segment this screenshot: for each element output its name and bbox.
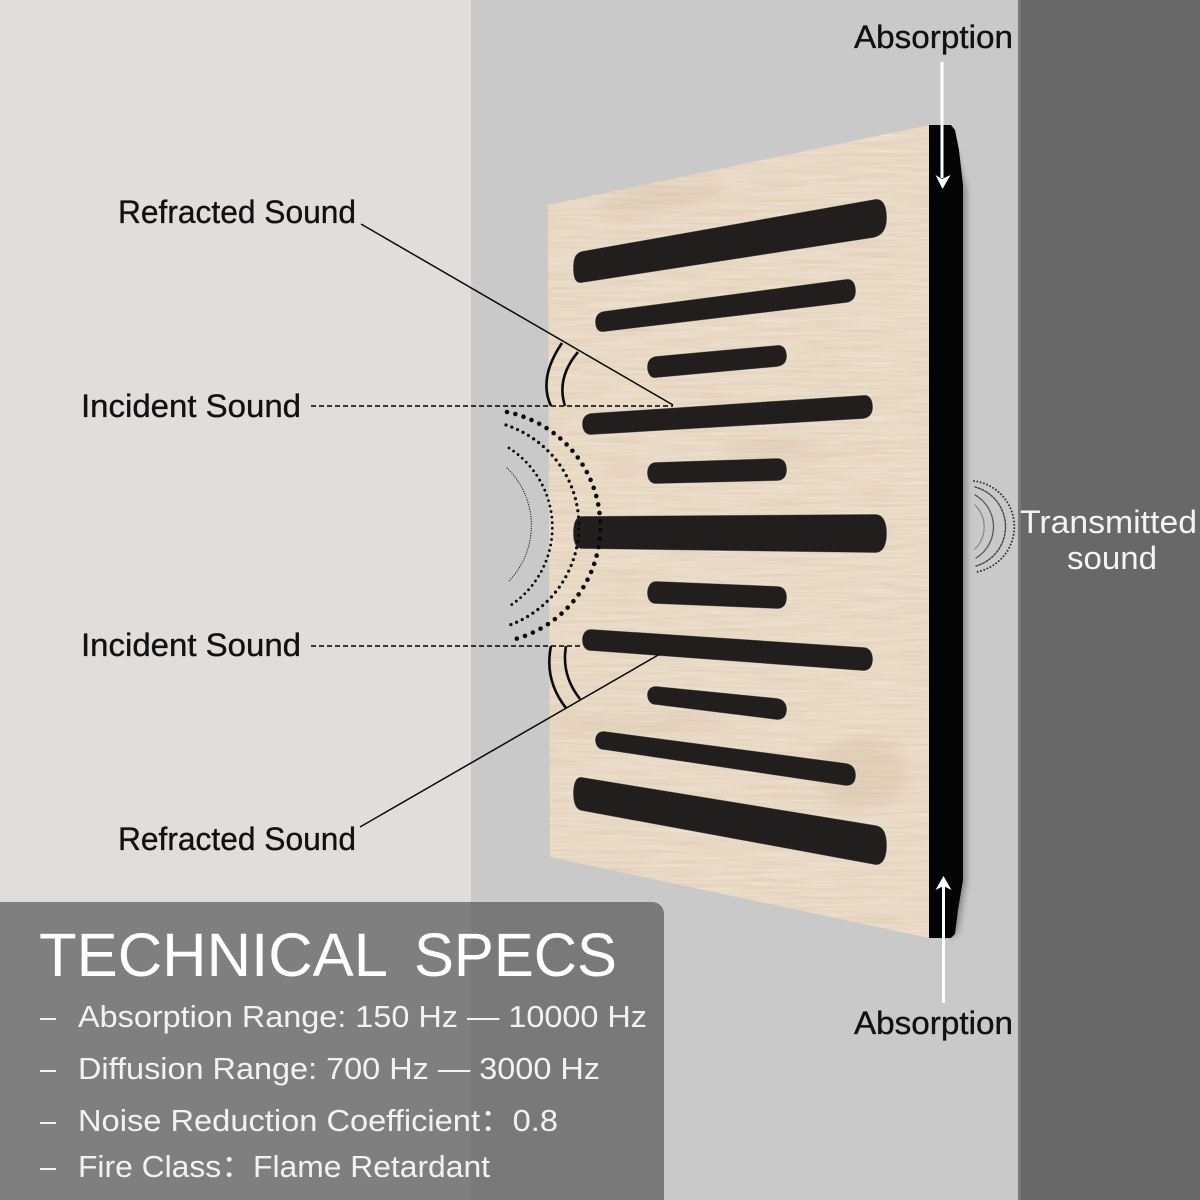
arcs: top refracted sound <box>546 343 578 406</box>
background: left wall <box>0 0 471 1200</box>
arrow: absorption up <box>936 876 952 1003</box>
heading: technical specs: SPECS <box>414 921 617 989</box>
leader: bottom refracted sound <box>360 654 660 827</box>
panel slots <box>573 199 887 865</box>
leader: top incident sound <box>311 405 673 407</box>
heading: technical specs <box>39 921 617 989</box>
arcs: dotted incident sound waves <box>506 412 600 640</box>
label: transmitted sound: sound <box>1067 540 1157 576</box>
arrow: absorption down <box>936 62 950 189</box>
spec list: Fire Class：Flame Retardant <box>78 1149 490 1184</box>
arcs: transmitted sound waves <box>974 481 1014 572</box>
background: right dark band <box>1018 0 1200 1200</box>
panel wood face <box>540 120 932 942</box>
leader: bottom incident sound <box>311 645 582 647</box>
label: transmitted sound <box>1020 504 1197 576</box>
label: refracted sound top: Refracted Sound <box>118 194 356 230</box>
label: incident sound bottom: Incident Sound <box>81 627 301 663</box>
label: refracted sound bottom: Refracted Sound <box>118 821 356 857</box>
spec list: Absorption Range: 150 Hz — 10000 Hz <box>78 999 647 1034</box>
arcs: bottom refracted sound <box>549 646 580 708</box>
label: absorption top: Absorption <box>854 19 1013 55</box>
spec list <box>40 999 647 1184</box>
spec list: Noise Reduction Coefficient：0.8 <box>78 1103 558 1138</box>
heading: technical specs: TECHNICAL <box>39 921 388 989</box>
label: absorption bottom: Absorption <box>854 1005 1013 1041</box>
panel: technical specs <box>0 902 664 1200</box>
background: centre wall <box>471 0 1018 1200</box>
label: incident sound top: Incident Sound <box>81 388 301 424</box>
spec list: Diffusion Range: 700 Hz — 3000 Hz <box>78 1051 600 1086</box>
leader: top refracted sound <box>361 224 673 405</box>
label: transmitted sound: Transmitted <box>1020 504 1197 540</box>
panel side edge <box>928 125 966 940</box>
acoustic panel <box>540 120 966 942</box>
